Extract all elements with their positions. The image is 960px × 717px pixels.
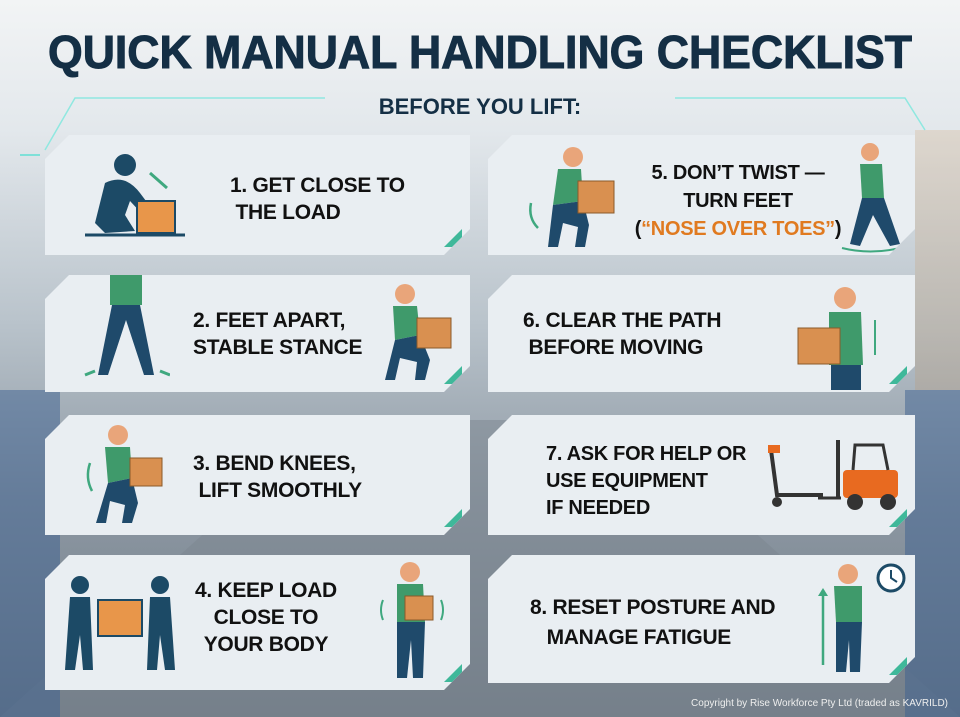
icon: pallet jack and forklift — [768, 440, 898, 510]
icon: bending worker — [86, 425, 162, 523]
text — [195, 582, 336, 651]
text: CLOSE TO — [214, 606, 318, 629]
text: 1. GET CLOSE TO — [230, 174, 405, 197]
text: YOUR BODY — [204, 633, 328, 656]
text: 7. ASK FOR HELP OR — [546, 443, 746, 465]
text — [524, 312, 720, 354]
panel: 5 don't twist — [488, 135, 915, 255]
panel: 1 get close — [45, 135, 470, 255]
panel: 7 ask for help — [488, 415, 915, 535]
icon: clock — [876, 564, 906, 592]
text: USE EQUIPMENT — [546, 470, 708, 492]
text: IF NEEDED — [546, 497, 650, 519]
icon: standing worker with upward arrow — [818, 564, 862, 672]
icon: two people carrying box — [65, 576, 175, 670]
text: 3. BEND KNEES, — [193, 452, 356, 475]
text: (“NOSE OVER TOES”) — [635, 218, 841, 240]
panel: 8 reset posture — [488, 555, 915, 683]
text: BEFORE MOVING — [529, 336, 703, 359]
icon: legs apart — [84, 275, 170, 376]
text: STABLE STANCE — [193, 336, 362, 359]
icon: walking worker — [842, 143, 900, 252]
text: 6. CLEAR THE PATH — [523, 309, 721, 332]
text: THE LOAD — [236, 201, 340, 224]
text — [194, 312, 362, 354]
text: 4. KEEP LOAD — [195, 579, 337, 602]
title: QUICK MANUAL HANDLING CHECKLIST — [48, 26, 912, 78]
text — [546, 446, 746, 514]
panel: 3 bend knees — [45, 415, 470, 535]
panel: 4 keep load close — [45, 555, 470, 690]
text: LIFT SMOOTHLY — [199, 479, 362, 502]
icon: worker holding box — [380, 562, 444, 678]
text — [530, 600, 775, 644]
panel: 2 feet apart — [45, 275, 470, 392]
icon: squatting worker with box — [385, 284, 452, 380]
icon: crouching figure with box — [85, 154, 185, 236]
subtitle: BEFORE YOU LIFT: — [379, 94, 581, 119]
panel: 6 clear the path — [488, 275, 915, 392]
text — [231, 178, 404, 219]
text: TURN FEET — [683, 190, 793, 212]
footer: copyright: Copyright by Rise Workforce Pty Ltd (traded as KAVRILD) — [691, 698, 948, 709]
text: 2. FEET APART, — [193, 309, 345, 332]
text — [194, 456, 362, 497]
text: MANAGE FATIGUE — [547, 626, 731, 649]
text: 5. DON’T TWIST — — [652, 162, 824, 184]
text — [636, 165, 841, 239]
icon: squatting worker with box — [529, 147, 614, 247]
text: 8. RESET POSTURE AND — [530, 596, 775, 619]
icon: worker carrying box — [798, 287, 876, 390]
